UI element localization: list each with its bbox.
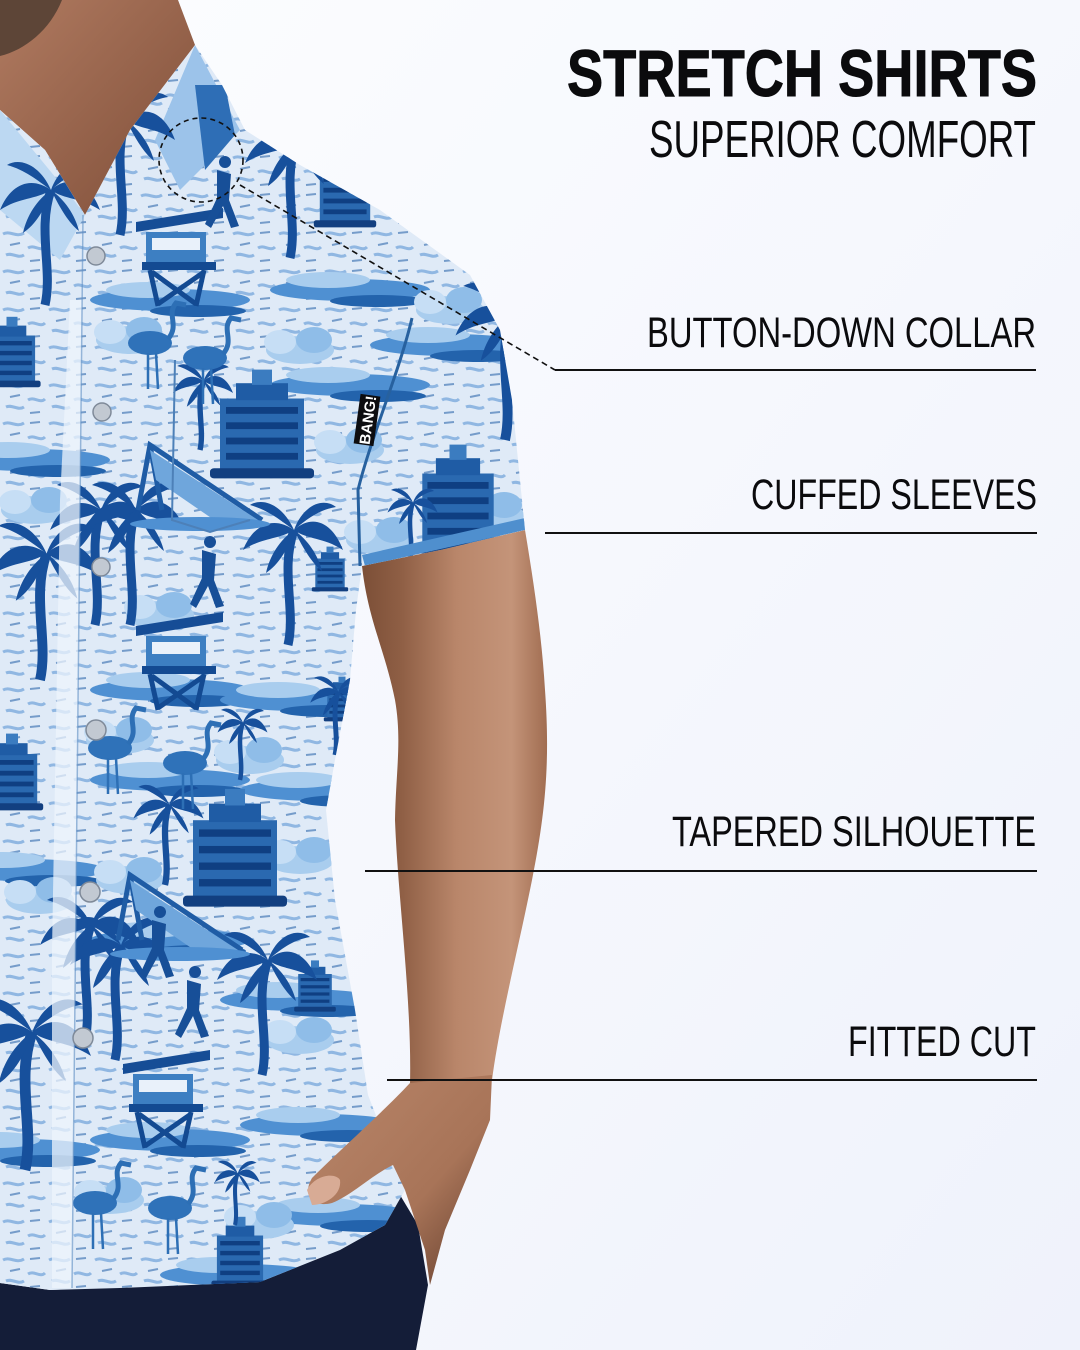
arm bbox=[362, 530, 547, 1085]
palms bbox=[0, 92, 565, 1225]
neck and chest skin bbox=[0, 0, 195, 215]
lifeguard towers bbox=[123, 208, 223, 1148]
stubble bbox=[0, 0, 62, 56]
thumb bbox=[307, 1176, 340, 1205]
sleeve seam bbox=[358, 318, 412, 566]
volleyball nets bbox=[110, 445, 270, 961]
front placket bbox=[52, 300, 82, 1288]
printed texture bbox=[2, 52, 524, 1288]
hand in pocket bbox=[308, 1075, 492, 1285]
black brand tag: BANG! bbox=[357, 395, 380, 446]
buildings bbox=[0, 151, 502, 1287]
chest pocket bbox=[172, 360, 250, 532]
callout: collar detail circle bbox=[159, 118, 243, 202]
shirt bbox=[0, 45, 525, 1290]
flamingos bbox=[73, 303, 241, 1254]
clouds bbox=[0, 287, 524, 1239]
sea bands bbox=[0, 272, 530, 1292]
collar bbox=[155, 45, 240, 190]
trousers bbox=[0, 1195, 428, 1350]
cuff bbox=[362, 518, 525, 566]
callout: dashed leader line bbox=[240, 185, 555, 370]
players bbox=[140, 156, 239, 1038]
buttons bbox=[73, 247, 111, 1048]
photo: model wearing shirt bbox=[0, 0, 566, 1350]
